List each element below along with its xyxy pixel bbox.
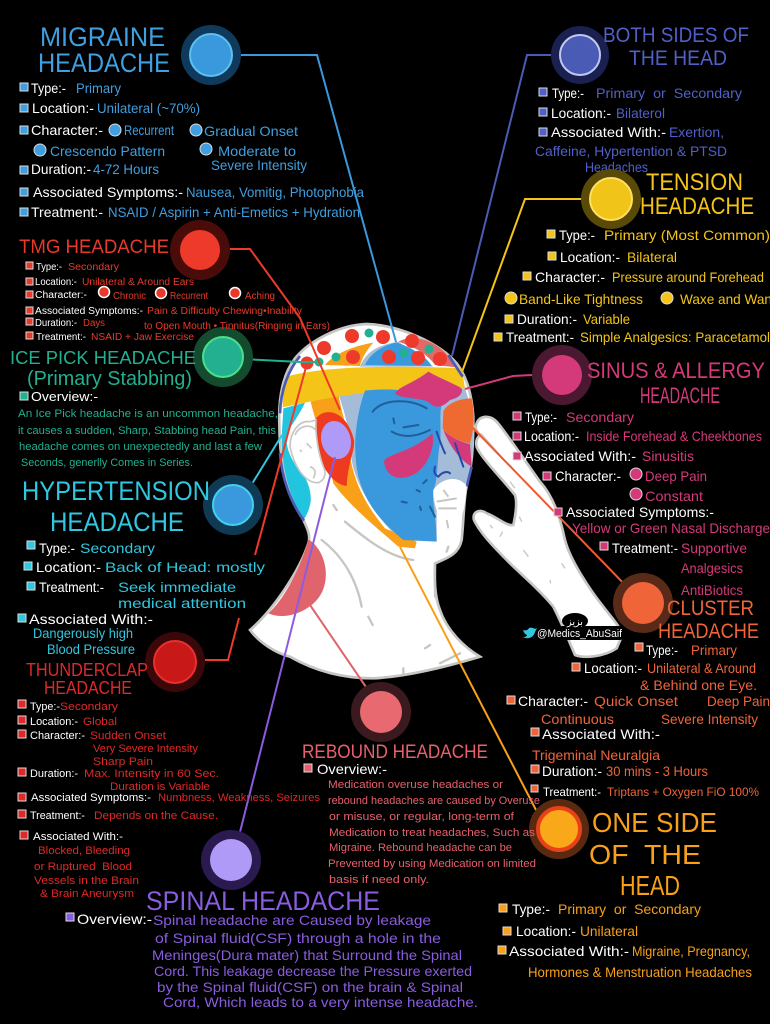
details: rebound: or misuse, or regular, long-term of <box>329 811 515 823</box>
details: sinus: AntiBiotics <box>681 582 743 598</box>
details: sinus: Deep Pain <box>645 468 707 484</box>
details: cluster: Treatment:- <box>543 785 601 799</box>
details: sinus: Treatment:- <box>612 540 678 556</box>
heading: TMG: TMG HEADACHE <box>19 237 169 258</box>
details: spinal: Spinal headache are Caused by leakage <box>153 912 431 928</box>
details: migraine: Unilateral (~70%) <box>97 100 200 116</box>
details: rebound: Prevented by using Medication on limited <box>328 858 536 870</box>
details: rebound: basis if need only. <box>329 874 429 886</box>
details: thunderclap: Associated Symptoms:- <box>31 792 151 804</box>
heading: sinus <box>587 358 765 408</box>
details: migraine: Treatment:- <box>31 204 103 220</box>
details: TMG: to Open Mouth • Tinnitus(Ringing in Ears) <box>144 321 330 332</box>
node: hypertension <box>203 475 263 535</box>
details: thunderclap: Duration is Variable <box>110 781 210 793</box>
details: rebound: Medication overuse headaches or <box>328 779 503 791</box>
node: spinal <box>201 830 261 890</box>
heading: spinal: SPINAL HEADACHE <box>146 886 380 916</box>
line: tension <box>462 199 590 372</box>
panel: migraine headache <box>20 22 364 220</box>
heading: thunderclap: HEADACHE <box>44 678 132 698</box>
node: migraine <box>181 25 241 85</box>
panel: rebound headache <box>302 682 540 886</box>
details: sinus: Sinusitis <box>642 448 694 464</box>
node: thunderclap <box>145 632 205 692</box>
details: thunderclap: Type:- <box>30 701 60 713</box>
heading: rebound: REBOUND HEADACHE <box>302 742 488 763</box>
heading: tension <box>640 169 754 220</box>
details: sinus: Analgesics <box>681 560 743 576</box>
details: rebound: Medication to treat headaches, Such as <box>329 827 536 839</box>
line: thunderclap lower <box>205 618 239 660</box>
details: tension: Type:- <box>559 227 595 243</box>
node: sinus <box>532 345 592 405</box>
details: cluster: Continuous <box>541 711 614 727</box>
details: one side: Primary or Secondary <box>558 901 701 917</box>
heading: hypertension <box>22 476 210 537</box>
twitter handle: بزيز <box>566 617 583 628</box>
line: cluster <box>473 428 630 590</box>
node: one side <box>529 799 589 859</box>
heading: sinus: HEADACHE <box>640 383 720 408</box>
details: thunderclap: Numbness, Weakness, Seizures <box>158 792 320 804</box>
heading: one side: ONE SIDE <box>592 807 717 838</box>
panel: one side of the head <box>498 799 752 980</box>
node: cluster <box>613 573 673 633</box>
details: spinal: Cord. This leakage decrease the Pressure exerted <box>154 963 472 979</box>
details: hypertension: Seek immediate <box>118 579 236 595</box>
heading: ice pick <box>10 348 196 390</box>
details: TMG: Unilateral & Around Ears <box>82 277 194 288</box>
details: hypertension <box>18 540 265 657</box>
details: migraine: Primary <box>76 80 121 96</box>
details: sinus: Type:- <box>525 409 557 425</box>
details: tension: Duration:- <box>517 311 577 327</box>
details: TMG: Associated Symptoms:- <box>35 306 143 317</box>
details: TMG: Character:- <box>35 290 87 301</box>
details: hypertension: Type:- <box>39 540 75 556</box>
heading: both sides <box>603 24 749 70</box>
details: both sides: Primary or Secondary <box>596 85 742 101</box>
details: cluster: Primary <box>691 642 737 658</box>
details: both sides: Headaches <box>585 159 648 175</box>
details: migraine: Recurrent <box>124 122 174 138</box>
details: both sides: Bilaterol <box>616 105 665 121</box>
twitter handle <box>523 613 625 640</box>
heading: ice pick: (Primary Stabbing) <box>27 368 192 390</box>
details: thunderclap <box>18 700 320 900</box>
details: ice pick: Seconds, generlly Comes in Series. <box>21 457 193 469</box>
details: TMG: Location:- <box>35 277 77 288</box>
line: both sides <box>452 55 560 356</box>
heading: one side <box>589 807 717 901</box>
details: both sides: Type:- <box>552 85 584 101</box>
details: hypertension: Secondary <box>80 540 155 556</box>
node: tension <box>581 169 641 229</box>
details: sinus: Associated With:- <box>524 448 636 464</box>
details: TMG: Secondary <box>68 262 119 273</box>
details: thunderclap: Duration:- <box>30 768 78 780</box>
details: hypertension: Back of Head: mostly <box>105 559 265 575</box>
details: thunderclap: Very Severe Intensity <box>93 743 198 755</box>
illustration: head with pain zones <box>250 324 480 678</box>
panel: both sides of the head <box>535 24 749 175</box>
details: TMG: NSAID + Jaw Exercise <box>91 332 194 343</box>
details: thunderclap: Sudden Onset <box>90 730 166 742</box>
line: sinus <box>465 375 532 389</box>
details: TMG: Type:- <box>36 262 62 273</box>
details: cluster: Triptans + Oxygen FiO 100% <box>607 785 759 799</box>
details: both sides: Caffeine, Hypertention & PTSD <box>535 143 727 159</box>
panel: thunderclap headache <box>18 632 320 900</box>
details: thunderclap: Max. Intensity in 60 Sec. <box>84 768 219 780</box>
details: migraine: Crescendo Pattern <box>50 143 165 159</box>
details: spinal <box>66 911 478 1010</box>
panel: ice pick headache <box>10 327 278 469</box>
details: thunderclap: Depends on the Cause. <box>94 810 218 822</box>
line: rebound <box>310 605 368 690</box>
details: both sides: Location:- <box>551 105 611 121</box>
details: both sides <box>535 85 742 175</box>
details: rebound: Migraine. Rebound headache can be <box>329 842 512 854</box>
panel: spinal headache <box>66 830 478 1010</box>
details: cluster: Location:- <box>584 660 642 676</box>
details: tension: Bilateral <box>627 249 677 265</box>
heading: migraine: HEADACHE <box>38 48 170 78</box>
panel: sinus and allergy headache <box>513 345 770 598</box>
details: ice pick: An Ice Pick headache is an uncommon headache, <box>18 408 278 420</box>
details: migraine: Type:- <box>31 80 66 96</box>
details: thunderclap: Secondary <box>60 701 119 713</box>
details: migraine: Gradual Onset <box>204 123 298 139</box>
connector lines <box>205 55 630 832</box>
details: migraine: Character:- <box>31 122 103 138</box>
heading: one side: HEAD <box>620 870 680 901</box>
details: one side: Associated With:- <box>509 943 629 959</box>
details: ice pick: headache comes on unexpectedly and last a few <box>19 441 262 453</box>
line: one side <box>400 547 536 810</box>
details: cluster: Trigeminal Neuralgia <box>532 747 660 763</box>
node: ice pick <box>193 327 253 387</box>
details: migraine: Duration:- <box>31 161 91 177</box>
details: spinal: Overview:- <box>77 911 152 927</box>
details: thunderclap: Location:- <box>30 716 78 728</box>
details: both sides: Associated With:- <box>551 124 666 140</box>
colour zones <box>280 338 474 548</box>
details: cluster <box>507 642 770 799</box>
details: cluster: Duration:- <box>542 763 602 779</box>
details: thunderclap: Blocked, Bleeding <box>38 845 130 857</box>
heading: both sides: THE HEAD <box>629 47 727 70</box>
details: cluster: Severe Intensity <box>661 711 758 727</box>
details: migraine: NSAID / Aspirin + Anti-Emetics + Hydration <box>108 204 360 220</box>
details: sinus <box>513 409 770 598</box>
details: cluster: Character:- <box>518 693 588 709</box>
heading: thunderclap: THUNDERCLAP <box>26 660 148 680</box>
twitter handle: @Medics_AbuSaif <box>537 628 623 640</box>
details: TMG <box>26 262 330 343</box>
heading: both sides: BOTH SIDES OF <box>603 24 749 47</box>
panel: hypertension headache <box>18 475 265 657</box>
details: one side: Type:- <box>512 901 550 917</box>
details: hypertension: Treatment:- <box>39 579 104 595</box>
line: hypertension <box>247 435 282 492</box>
details: tension: Primary (Most Common) <box>604 227 770 243</box>
heading: ice pick: ICE PICK HEADACHE <box>10 348 196 368</box>
details: hypertension: Associated With:- <box>29 611 153 627</box>
details: migraine <box>20 80 364 220</box>
node: TMG <box>170 220 230 280</box>
details: thunderclap: Treatment:- <box>30 810 85 822</box>
panel: cluster headache <box>507 573 770 799</box>
head dots: red and green pain points <box>300 328 447 370</box>
heading: tension: TENSION <box>646 169 743 196</box>
heading: thunderclap <box>26 660 148 698</box>
details: TMG: Pain & Difficulty Chewing•Inability <box>147 306 302 317</box>
details: migraine: Moderate to <box>218 143 296 159</box>
details: spinal: by the Spinal fluid(CSF) on the brain & Spinal <box>157 979 463 995</box>
details: hypertension: Location:- <box>36 559 101 575</box>
node: both sides <box>551 26 609 84</box>
details: spinal: of Spinal fluid(CSF) through a hole in the <box>155 930 441 946</box>
details: sinus: Constant <box>645 488 703 504</box>
details: ice pick <box>18 389 278 469</box>
details: sinus: Character:- <box>555 468 621 484</box>
heading: cluster: CLUSTER <box>667 597 754 620</box>
details: hypertension: Blood Pressure <box>47 641 135 657</box>
details: tension: Variable <box>583 311 630 327</box>
details: spinal: Meninges(Dura mater) that Surround the Spinal <box>152 947 462 963</box>
illustration: raised hand <box>474 417 622 657</box>
line: thunderclap upper <box>255 367 306 555</box>
details: spinal: Cord, Which leads to a very intense headache. <box>163 994 478 1010</box>
details: both sides: Exertion, <box>669 124 724 140</box>
details: TMG: Chronic <box>113 291 146 302</box>
details: TMG: Treatment:- <box>36 332 86 343</box>
line: TMG <box>222 249 340 410</box>
details: TMG: Days <box>83 318 105 329</box>
line: ice pick <box>243 359 318 362</box>
details: one side: Unilateral <box>580 923 638 939</box>
heading: hypertension: HYPERTENSION <box>22 476 210 506</box>
heading: tension: HEADACHE <box>640 193 754 220</box>
details: TMG: Duration:- <box>35 318 77 329</box>
details: thunderclap: Character:- <box>30 730 85 742</box>
details: one side <box>498 901 752 980</box>
details: tension: Location:- <box>560 249 620 265</box>
details: thunderclap: Sharp Pain <box>93 756 153 768</box>
details: cluster: 30 mins - 3 Hours <box>606 763 708 779</box>
details: tension: Character:- <box>535 269 605 285</box>
details: migraine: Location:- <box>32 100 94 116</box>
details: thunderclap: & Brain Aneurysm <box>40 888 134 900</box>
line: migraine <box>232 55 396 342</box>
heading: migraine <box>38 22 170 78</box>
panel: TMG headache <box>19 220 330 343</box>
details: migraine: Nausea, Vomitig, Photophobia <box>186 184 364 200</box>
details: rebound: rebound headaches are caused by Overuse <box>328 795 540 807</box>
details: TMG: Aching <box>245 291 275 302</box>
heading: hypertension: HEADACHE <box>50 507 184 537</box>
details: cluster: Associated With:- <box>542 726 660 742</box>
details: sinus: Supportive <box>681 540 747 556</box>
details: one side: Migraine, Pregnancy, <box>632 943 750 959</box>
details: one side: Location:- <box>516 923 576 939</box>
details: hypertension: Dangerously high <box>33 625 133 641</box>
details: sinus: Associated Symptoms:- <box>566 504 714 520</box>
details: thunderclap: Global <box>83 716 117 728</box>
details: tension: Band-Like Tightness <box>519 291 643 307</box>
details: cluster: Quick Onset <box>594 693 678 709</box>
details: TMG: Recurrent <box>170 291 208 302</box>
heading: cluster <box>658 597 759 643</box>
details: ice pick: Overview:- <box>31 389 98 404</box>
panel: tension headache <box>494 169 770 345</box>
line: spinal <box>240 457 335 832</box>
details: rebound <box>304 761 540 886</box>
details: ice pick: it causes a sudden, Sharp, Stabbing head Pain, this <box>18 425 277 437</box>
details: migraine: 4-72 Hours <box>93 161 159 177</box>
heading: one side: OF THE <box>589 839 701 870</box>
head silhouette <box>250 324 480 678</box>
details: cluster: & Behind one Eye. <box>640 677 757 693</box>
details: migraine: Severe Intensity <box>211 157 307 173</box>
details: rebound: Overview:- <box>317 761 387 777</box>
details: thunderclap: Associated With:- <box>33 831 123 843</box>
details: hypertension: medical attention <box>118 595 246 611</box>
details: cluster: Unilateral & Around <box>647 660 756 676</box>
details: tension <box>494 227 770 345</box>
heading: migraine: MIGRAINE <box>40 22 165 52</box>
node: rebound <box>351 682 411 742</box>
details: sinus: Secondary <box>566 409 634 425</box>
details: cluster: Type:- <box>646 642 678 658</box>
details: tension: Treatment:- <box>506 329 574 345</box>
details: one side: Hormones & Menstruation Headaches <box>528 964 752 980</box>
details: sinus: Location:- <box>524 428 579 444</box>
details: migraine: Associated Symptoms:- <box>33 184 183 200</box>
details: thunderclap: or Ruptured Blood <box>34 861 132 873</box>
details: thunderclap: Vessels in the Brain <box>34 875 139 887</box>
